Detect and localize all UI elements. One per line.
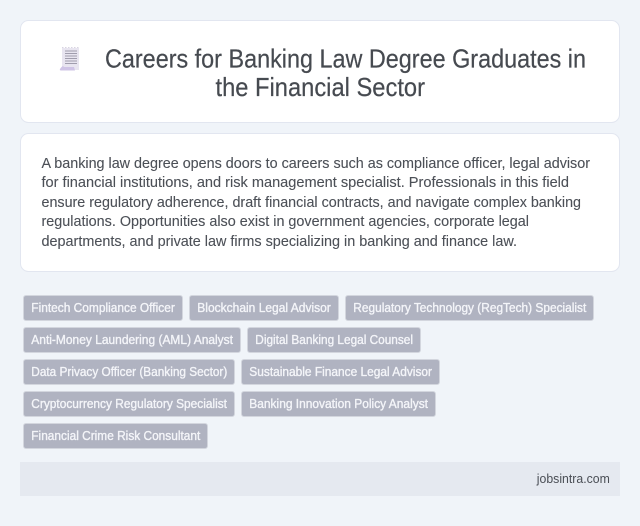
title <box>105 46 586 102</box>
title: the Financial Sector <box>216 74 425 102</box>
text block: description paragraph: A banking law degree opens doors to careers such as compliance officer, legal advisor <box>42 156 590 172</box>
panel: title card <box>20 20 620 122</box>
tag: Cryptocurrency Regulatory Specialist <box>24 392 234 416</box>
text block: description paragraph: ensure regulatory adherence, draft financial contracts, and navigate complex banking <box>42 195 581 211</box>
tag: Banking Innovation Policy Analyst: Banking Innovation Policy Analyst <box>249 397 428 411</box>
tag: Fintech Compliance Officer <box>24 296 182 320</box>
tag: Fintech Compliance Officer: Fintech Compliance Officer <box>31 301 175 315</box>
tag: Regulatory Technology (RegTech) Specialist <box>346 296 594 320</box>
tag: Cryptocurrency Regulatory Specialist: Cryptocurrency Regulatory Specialist <box>31 397 227 411</box>
icon: document receipt <box>60 48 79 70</box>
tag: Financial Crime Risk Consultant <box>24 424 208 448</box>
tag: Data Privacy Officer (Banking Sector) <box>24 360 234 384</box>
text block: description paragraph: departments, and private law firms specializing in banking and finance law. <box>42 234 517 250</box>
tag: Financial Crime Risk Consultant: Financial Crime Risk Consultant <box>31 429 201 443</box>
tag: Blockchain Legal Advisor <box>190 296 338 320</box>
tag: Anti-Money Laundering (AML) Analyst: Anti-Money Laundering (AML) Analyst <box>31 333 233 347</box>
footer: jobsintra.com <box>536 471 610 486</box>
tag: Digital Banking Legal Counsel: Digital Banking Legal Counsel <box>255 333 413 347</box>
text block: description paragraph: for financial institutions, and risk management specialist. Professionals in this field <box>42 175 569 191</box>
tag: Blockchain Legal Advisor: Blockchain Legal Advisor <box>197 301 331 315</box>
text block: description paragraph <box>42 156 590 250</box>
tag: Regulatory Technology (RegTech) Specialist: Regulatory Technology (RegTech) Specialist <box>353 301 587 315</box>
tag: Digital Banking Legal Counsel <box>248 328 420 352</box>
footer <box>20 462 620 496</box>
tag: Banking Innovation Policy Analyst <box>242 392 436 416</box>
panel: career tags <box>24 296 594 448</box>
tag: Data Privacy Officer (Banking Sector): Data Privacy Officer (Banking Sector) <box>31 365 227 379</box>
tag: Anti-Money Laundering (AML) Analyst <box>24 328 240 352</box>
panel: description <box>20 134 620 272</box>
tag: Sustainable Finance Legal Advisor: Sustainable Finance Legal Advisor <box>249 365 432 379</box>
text block: description paragraph: regulations. Opportunities also exist in government agencies, corporate legal <box>42 214 529 230</box>
title: Careers for Banking Law Degree Graduates in <box>105 46 586 74</box>
tag: Sustainable Finance Legal Advisor <box>242 360 440 384</box>
